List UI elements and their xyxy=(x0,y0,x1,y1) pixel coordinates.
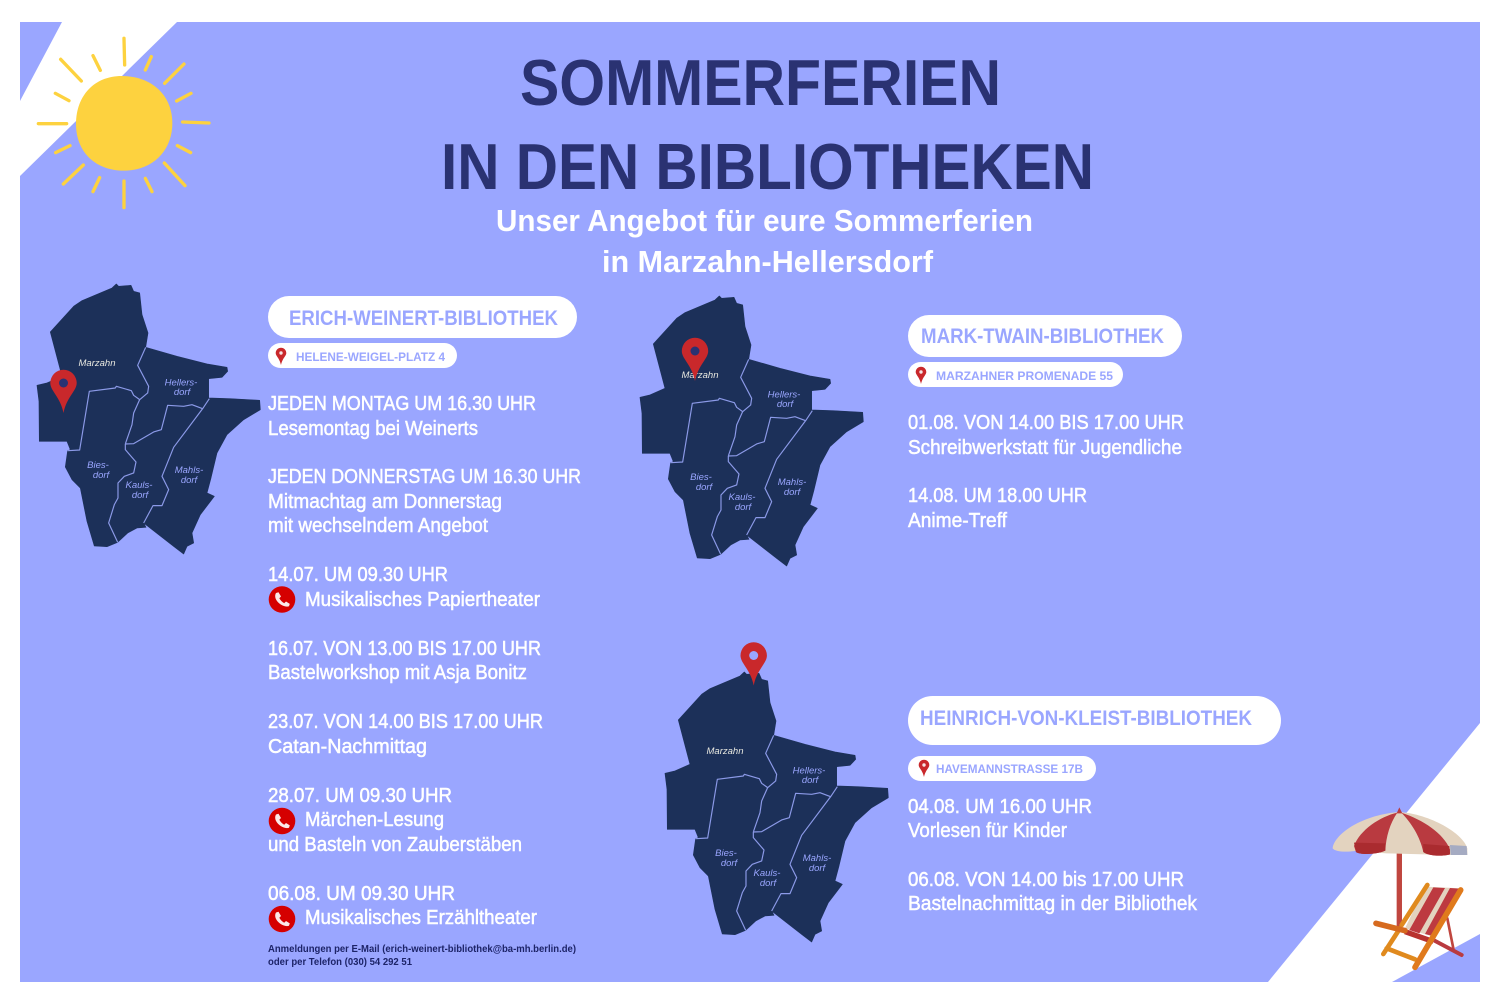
address pill: HELENE-WEIGEL-PLATZ 4 xyxy=(296,350,445,364)
event: Anime-Treff: 14.08. UM 18.00 UHR xyxy=(908,485,1087,507)
white corner band: bottom right xyxy=(1268,723,1480,982)
event: Catan-Nachmittag xyxy=(268,711,543,758)
subtitle xyxy=(496,203,1033,279)
event: Catan-Nachmittag: Catan-Nachmittag xyxy=(268,736,427,758)
event: Catan-Nachmittag: 23.07. VON 14.00 BIS 17.00 UHR xyxy=(268,711,543,733)
map: Heinrich-von-Kleist-Bibliothek: Mahls- xyxy=(803,853,831,864)
event: Bastelworkshop: Bastelworkshop mit Asja Bonitz xyxy=(268,662,527,684)
title: SOMMERFERIEN xyxy=(520,46,1001,119)
map: Erich-Weinert-Bibliothek: Hellers- xyxy=(165,378,197,388)
event: Lesemontag: Lesemontag bei Weinerts xyxy=(268,418,478,440)
map: Mark-Twain-Bibliothek: dorf xyxy=(784,487,802,498)
event: Erzähltheater: Musikalisches Erzähltheater xyxy=(305,907,537,929)
library name pill xyxy=(908,315,1182,357)
event: Papiertheater: 14.07. UM 09.30 UHR xyxy=(268,564,448,586)
library name pill: HEINRICH-VON-KLEIST-BIBLIOTHEK xyxy=(920,707,1252,730)
event: Schreibwerkstatt: 01.08. VON 14.00 BIS 17.00 UHR xyxy=(908,412,1184,434)
map: Erich-Weinert-Bibliothek: Mahls- xyxy=(175,465,203,476)
event: Mitmachtag: mit wechselndem Angebot xyxy=(268,515,488,537)
event: Anime-Treff xyxy=(908,485,1087,532)
address pill xyxy=(268,343,457,368)
event: Bastelnachmittag: 06.08. VON 14.00 bis 17.00 UHR xyxy=(908,869,1184,891)
map: Heinrich-von-Kleist-Bibliothek: Hellers- xyxy=(793,766,825,776)
library name pill xyxy=(908,696,1281,745)
library name pill: ERICH-WEINERT-BIBLIOTHEK xyxy=(289,307,558,330)
map: Erich-Weinert-Bibliothek: Marzahn xyxy=(79,358,115,369)
event: Schreibwerkstatt: Schreibwerkstatt für Jugendliche xyxy=(908,437,1182,459)
title: IN DEN BIBLIOTHEKEN xyxy=(441,130,1094,203)
icon: beach umbrella and deck chair xyxy=(1333,807,1467,967)
event: Märchen-Lesung: 28.07. UM 09.30 UHR xyxy=(268,785,452,807)
map: Heinrich-von-Kleist-Bibliothek: dorf xyxy=(721,858,739,869)
icon: sun xyxy=(38,38,209,208)
map: Heinrich-von-Kleist-Bibliothek: Kauls- xyxy=(754,868,780,879)
address pill: MARZAHNER PROMENADE 55 xyxy=(936,369,1113,383)
map: Heinrich-von-Kleist-Bibliothek xyxy=(665,642,888,942)
event: Bastelworkshop xyxy=(268,638,541,684)
event: Bastelnachmittag: Bastelnachmittag in der Bibliothek xyxy=(908,893,1198,915)
library name pill: MARK-TWAIN-BIBLIOTHEK xyxy=(921,325,1164,348)
event: Erzähltheater: 06.08. UM 09.30 UHR xyxy=(268,883,455,905)
subtitle: in Marzahn-Hellersdorf xyxy=(602,244,934,279)
umbrella xyxy=(1333,807,1467,928)
title xyxy=(441,46,1094,203)
map: Erich-Weinert-Bibliothek: dorf xyxy=(93,470,111,481)
map: Heinrich-von-Kleist-Bibliothek: dorf xyxy=(809,863,827,874)
event: Vorlesen: Vorlesen für Kinder xyxy=(908,820,1067,842)
event: Anime-Treff: Anime-Treff xyxy=(908,510,1007,532)
deck chair xyxy=(1376,885,1462,967)
map: Erich-Weinert-Bibliothek: dorf xyxy=(181,475,199,486)
map: Erich-Weinert-Bibliothek xyxy=(37,284,260,554)
event: Lesemontag: JEDEN MONTAG UM 16.30 UHR xyxy=(268,393,536,415)
event: Märchen-Lesung: Märchen-Lesung xyxy=(305,809,444,831)
event: Mitmachtag: JEDEN DONNERSTAG UM 16.30 UHR xyxy=(268,466,581,488)
map: Erich-Weinert-Bibliothek: dorf xyxy=(174,387,192,398)
map: Mark-Twain-Bibliothek: Mahls- xyxy=(778,477,806,488)
map: Mark-Twain-Bibliothek: Hellers- xyxy=(768,390,800,400)
event: Lesemontag xyxy=(268,393,536,440)
registration note xyxy=(268,943,576,968)
registration note: Anmeldungen per E-Mail (erich-weinert-bibliothek@ba-mh.berlin.de) xyxy=(268,943,576,955)
address pill xyxy=(908,756,1096,781)
white corner band: top left xyxy=(20,22,177,176)
panel: Mark-Twain-Bibliothek xyxy=(908,315,1184,532)
map: Heinrich-von-Kleist-Bibliothek: Bies- xyxy=(715,848,737,859)
event: Mitmachtag xyxy=(268,466,581,537)
panel: Heinrich-von-Kleist-Bibliothek xyxy=(908,696,1281,915)
map pin xyxy=(50,370,77,413)
map: Mark-Twain-Bibliothek: dorf xyxy=(735,502,753,513)
library name pill xyxy=(268,296,577,338)
map: Mark-Twain-Bibliothek: dorf xyxy=(696,482,714,493)
panel: Erich-Weinert-Bibliothek xyxy=(268,296,581,968)
event: Bastelnachmittag xyxy=(908,869,1198,915)
map: Mark-Twain-Bibliothek: dorf xyxy=(777,399,795,410)
map: Mark-Twain-Bibliothek: Marzahn xyxy=(682,370,718,381)
event: Schreibwerkstatt xyxy=(908,412,1184,459)
map: Mark-Twain-Bibliothek: Kauls- xyxy=(729,492,755,503)
event: Papiertheater: Musikalisches Papiertheater xyxy=(305,589,540,611)
event: Vorlesen xyxy=(908,796,1092,842)
registration note: oder per Telefon (030) 54 292 51 xyxy=(268,956,412,968)
map: Erich-Weinert-Bibliothek: dorf xyxy=(132,490,150,501)
address pill xyxy=(908,362,1123,387)
event: Märchen-Lesung: und Basteln von Zauberstäben xyxy=(268,834,522,856)
map: Heinrich-von-Kleist-Bibliothek: dorf xyxy=(802,775,820,786)
map: Mark-Twain-Bibliothek xyxy=(640,296,863,566)
event: Mitmachtag: Mitmachtag am Donnerstag xyxy=(268,491,502,513)
address pill: HAVEMANNSTRASSE 17B xyxy=(936,762,1083,776)
map: Mark-Twain-Bibliothek: Bies- xyxy=(690,472,712,483)
map: Erich-Weinert-Bibliothek: Bies- xyxy=(87,460,109,471)
event: Märchen-Lesung xyxy=(268,785,522,856)
event: Vorlesen: 04.08. UM 16.00 UHR xyxy=(908,796,1092,818)
map pin xyxy=(740,642,767,686)
subtitle: Unser Angebot für eure Sommerferien xyxy=(496,203,1033,238)
event: Erzähltheater xyxy=(268,883,537,932)
event: Papiertheater xyxy=(268,564,540,613)
map: Heinrich-von-Kleist-Bibliothek: Marzahn xyxy=(707,746,743,757)
map: Heinrich-von-Kleist-Bibliothek: dorf xyxy=(760,878,778,889)
event: Bastelworkshop: 16.07. VON 13.00 BIS 17.00 UHR xyxy=(268,638,541,660)
map pin xyxy=(682,338,708,381)
map: Erich-Weinert-Bibliothek: Kauls- xyxy=(126,480,152,491)
